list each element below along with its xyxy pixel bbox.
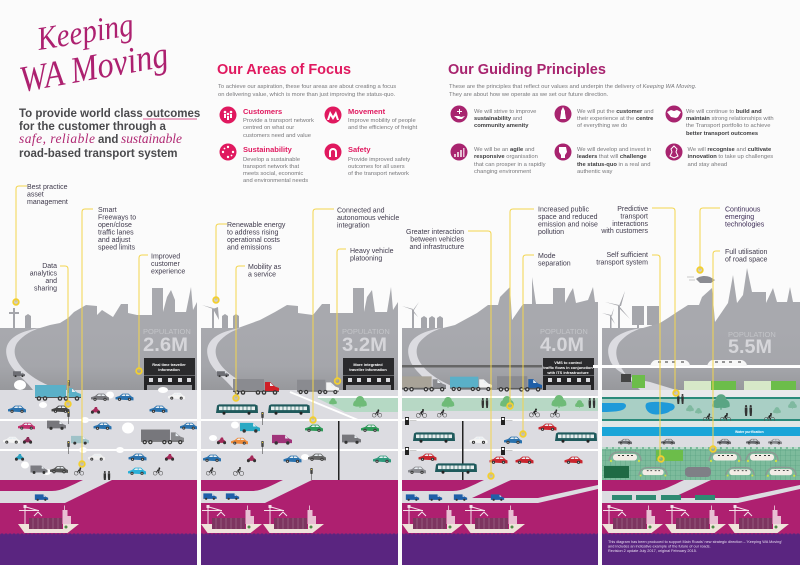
population label: POPULATION: [540, 327, 588, 336]
principle: leaders: the status-quo: [577, 162, 617, 168]
text: customers: Customers: [243, 107, 282, 116]
panel 4: population 5.5M: [593, 206, 800, 535]
port: magenta land, ramps and ships: [402, 480, 598, 535]
sign: real time traveller information: [144, 358, 195, 390]
annotation: smart freeways: Smart: [98, 207, 117, 214]
principle: sustainability: We will strive to improve: [474, 109, 536, 115]
annotation: best practice asset management: Best practice: [27, 184, 68, 191]
text: safety: [348, 145, 410, 177]
skyline: [602, 268, 800, 390]
annotation: renewable energy: to address rising: [227, 230, 278, 236]
sign: VMS: with ITS infrastructure: [546, 370, 589, 375]
population label: 3.2M: [342, 335, 387, 356]
text: safety: Safety: [348, 145, 371, 154]
icon: chart: [450, 144, 468, 160]
annotation: improved customer experience: customer: [151, 261, 180, 268]
principle: agile: that can prosper in a rapidly: [474, 162, 546, 168]
principle: customer: centre: [636, 116, 654, 122]
annotation: data analytics: Data: [42, 263, 57, 270]
annotation: connected and autonomous: integration: [337, 222, 370, 230]
icon: sustainability: [220, 144, 236, 160]
road lanes: [402, 390, 598, 480]
water purification channel: Water purification: [735, 430, 764, 434]
annotation: increased public space: space and reduced: [538, 214, 598, 221]
wind turbine and water tanks: [402, 302, 443, 329]
principle: innovation: We will: [688, 147, 707, 153]
annotation: increased public space: Increased public: [538, 206, 589, 214]
green corridor: [290, 392, 398, 420]
windmill and water tank: [9, 308, 31, 329]
annotation lines: [13, 186, 148, 467]
managed road line: [402, 365, 542, 368]
port: magenta land, ramp and ship: [0, 480, 197, 535]
title: Keeping WA Moving: [16, 7, 171, 101]
footer note: This diagram has been produced to support Main Roads' new strategic direction – 'Keeping WA Moving': [608, 540, 782, 544]
road lanes: [201, 390, 398, 480]
principle: customer: customer and: [616, 109, 654, 115]
population label: [342, 327, 390, 356]
exhaust clouds: [209, 422, 309, 460]
principles intro text: These are the principles that reflect our values and underpin the delivery of: [449, 84, 643, 90]
vehicles: lane 2: [3, 421, 197, 445]
icon: customers: [220, 106, 236, 124]
trucks: [402, 376, 542, 392]
text: sustainability: [243, 145, 308, 184]
sign: VMS: traffic flows in conjunction: [543, 365, 593, 370]
aspiration statement: safe, reliable: [19, 131, 95, 146]
icon: person: [554, 106, 572, 122]
footer note: and includes an indicative example of the future of our roads.: [608, 544, 711, 548]
green corridor with ponds: [602, 390, 800, 425]
population label: 5.5M: [728, 337, 772, 358]
annotation: renewable energy: and emissions: [227, 244, 272, 252]
principle: leaders: that will challenge: [599, 154, 647, 160]
annotation: data analytics: analytics: [30, 270, 58, 278]
aspiration statement: for the customer through a: [19, 121, 167, 133]
annotation: increased public space: emission and noise: [538, 222, 598, 228]
annotation: improved customer experience: Improved: [151, 254, 180, 260]
heading: our guiding principles: Our Guiding Principles: [448, 62, 606, 78]
skyline: [0, 287, 197, 390]
port: magenta land, ramp and ships: [201, 480, 398, 535]
text: customers: Provide a transport network: [243, 118, 314, 124]
text: movement: Movement: [348, 107, 386, 116]
principle: agile: changing environment: [474, 169, 531, 175]
icon: movement: [324, 106, 342, 124]
icon: innovation: [666, 144, 682, 160]
text: sustainability: transport network that: [243, 164, 299, 170]
text: sustainability: Develop a sustainable: [243, 157, 300, 163]
principle: leaders: authentic way: [577, 169, 613, 175]
principles intro text: Keeping WA Moving.: [643, 84, 696, 90]
vehicles: lane 1: [8, 385, 185, 414]
panel: our areas of focus: [217, 62, 418, 184]
annotation: connected and autonomous: autonomous vehicle: [337, 215, 399, 222]
footer note: Revision 2 update July 2017, original February 2015.: [608, 549, 697, 553]
annotation: best practice asset management: asset: [27, 192, 44, 198]
focus intro text: on delivering value, which is more than just improving the status-quo.: [218, 92, 396, 98]
sign: real time traveller information: information: [158, 367, 180, 372]
principle: innovation: recognise and cultivate: [707, 147, 771, 153]
annotation: predictive transport: Predictive: [617, 206, 648, 213]
title: Keeping WA Moving: WA Moving: [16, 34, 171, 101]
annotation: smart freeways: and adjust: [98, 237, 130, 244]
principle: customer: of everything we do: [577, 123, 627, 129]
principle: relationships: We will continue to: [686, 109, 736, 115]
title: Keeping WA Moving: Keeping: [34, 7, 136, 58]
population label: [143, 327, 191, 356]
panel 2: population 3.2M: [201, 208, 399, 535]
ocean band: [0, 533, 800, 565]
principle: leaders: in a real and: [617, 162, 650, 168]
text: movement: and the efficiency of freight: [348, 125, 418, 131]
sign: VMS: [543, 358, 594, 390]
principle: customer: We will put the: [577, 109, 616, 115]
icon: raised fist: [554, 144, 572, 160]
annotation: continuous emerging technologies: technologies: [725, 222, 765, 228]
population label: 4.0M: [540, 335, 584, 356]
aspiration statement: To provide world class outcomes: [19, 108, 200, 120]
road ramp curve: [408, 328, 462, 390]
annotation: heavy vehicle platooning: Heavy vehicle: [350, 248, 394, 255]
principles intro text: They are about how we operate as we set our future direction.: [449, 92, 609, 98]
annotation: renewable energy: operational costs: [227, 237, 280, 244]
annotation: heavy vehicle platooning: platooning: [350, 256, 382, 262]
annotation: predictive transport: with customers: [600, 228, 648, 235]
skyline: [402, 277, 598, 390]
annotation: smart freeways: Freeways to: [98, 214, 136, 222]
annotation: greater interaction: and infrastructure: [410, 244, 464, 251]
sign: more integrated traveller information: More integrated: [353, 362, 383, 367]
annotation: mobility as a service: Mobility as: [248, 264, 282, 271]
text: movement: [348, 107, 418, 131]
road ramp curve: [207, 328, 261, 390]
annotation: continuous emerging technologies: emerging: [725, 214, 754, 221]
aspiration statement: road-based transport system: [19, 148, 178, 160]
sign: real time traveller information: Real time traveller: [152, 362, 186, 367]
text: sustainability: Sustainability: [243, 145, 293, 154]
population label: 2.6M: [143, 335, 188, 356]
principle: sustainability: and: [511, 116, 522, 122]
annotation: smart freeways: open/close: [98, 222, 132, 229]
text: customers: [243, 107, 314, 139]
text: customers: centred on what our: [243, 125, 294, 131]
panel 3: population 4.0M: [402, 206, 598, 535]
aspiration statement: and: [98, 134, 118, 146]
text: safety: outcomes for all users: [348, 164, 405, 170]
port: magenta land, ramps and ships: [602, 480, 800, 535]
vehicle on ramp: [217, 371, 229, 377]
population label: [728, 330, 776, 358]
wind turbine and water tanks: [202, 305, 239, 329]
principle: innovation: and stay ahead: [688, 162, 727, 168]
motor cycle lane: [602, 436, 800, 447]
text: safety: Provide improved safety: [348, 157, 410, 163]
principle: agile: organisation: [505, 154, 538, 160]
icon: hand and plant: [450, 106, 468, 122]
flying vehicle: [687, 276, 715, 283]
panel 1: population 2.6M: [0, 184, 197, 535]
annotation: greater interaction: between vehicles: [410, 236, 464, 244]
annotation: full utilisation: Full utilisation: [725, 249, 768, 256]
principle: sustainability: community amenity: [474, 123, 529, 129]
vehicles: lanes with buses and electric cars: [405, 417, 597, 480]
vehicles: buses and lanes: [203, 404, 391, 481]
principle: agile: agile and: [510, 147, 534, 153]
annotation: greater interaction: Greater interaction: [406, 229, 464, 236]
principle: relationships: better transport outcomes: [686, 131, 758, 137]
trucks: platooning: [233, 379, 339, 395]
sign: more integrated traveller information: [343, 358, 394, 390]
elevated rail line with trains: [593, 360, 800, 368]
annotation: data analytics: sharing: [34, 286, 57, 292]
annotation: self sufficient: transport system: [596, 260, 648, 266]
principle: relationships: the Transport portfolio to achieve: [686, 123, 770, 129]
text: customers: customers need and value: [243, 133, 311, 139]
text: safety: of the transport network: [348, 171, 409, 177]
principle: customer: their experience at the: [577, 116, 636, 122]
principle: innovation: to take up challenges: [717, 154, 773, 160]
focus intro text: To achieve our aspiration, these four areas are about creating a focus: [218, 84, 396, 90]
annotation: predictive transport: transport: [620, 214, 648, 220]
road lanes: [0, 390, 197, 480]
road ramp curve: [602, 328, 683, 395]
sign: more integrated traveller information: traveller information: [349, 367, 387, 372]
annotation: best practice asset management: management: [27, 199, 68, 206]
autonomous pods and long trucks: [621, 374, 797, 394]
annotation: predictive transport: interactions: [612, 221, 648, 228]
principle: innovation: innovation: [688, 154, 717, 160]
sign: VMS: VMS to control: [554, 360, 582, 365]
annotation: smart freeways: traffic lanes: [98, 230, 134, 236]
green corridor: [402, 395, 598, 418]
annotation: data analytics: and: [45, 278, 57, 285]
annotation: smart freeways: speed limits: [98, 244, 135, 252]
aspiration statement: sustainable: [121, 131, 182, 146]
water purification channel: [602, 421, 800, 436]
annotation lines: [652, 208, 720, 462]
principle: relationships: maintain: [686, 116, 710, 122]
annotation: increased public space: pollution: [538, 229, 564, 236]
annotation: mode separation: Mode: [538, 253, 556, 260]
traffic lights: [67, 380, 70, 454]
principle: relationships: strong relationships with: [710, 116, 774, 122]
annotation: mobility as a service: a service: [248, 272, 276, 278]
annotation: self sufficient: Self sufficient: [606, 252, 648, 259]
exhaust clouds: [14, 380, 168, 475]
principle: agile: We will be an: [474, 147, 510, 153]
annotation: mode separation: separation: [538, 260, 571, 268]
wind turbines and solar panels: [602, 291, 659, 329]
population label: POPULATION: [143, 327, 191, 336]
principle: relationships: build and: [736, 109, 762, 115]
population label: POPULATION: [728, 330, 776, 339]
icon: handshake: [666, 106, 682, 122]
vehicle on ramp: [13, 371, 25, 377]
principle: sustainability: sustainability: [474, 116, 512, 122]
icon: safety: [324, 144, 342, 160]
annotation lines: [213, 209, 346, 423]
principle: leaders: leaders: [577, 154, 597, 160]
population label: POPULATION: [342, 327, 390, 336]
annotation: renewable energy: Renewable energy: [227, 222, 286, 229]
annotation: full utilisation: of road space: [725, 256, 768, 264]
population label: [540, 327, 588, 356]
principle: leaders: We will develop and invest in: [577, 147, 651, 153]
skyline: [201, 287, 398, 390]
aspiration statement: [19, 108, 200, 160]
principle: agile: responsive: [474, 154, 505, 160]
annotation: connected and autonomous: Connected and: [337, 208, 385, 214]
text: sustainability: meets social, economic: [243, 171, 303, 177]
road ramp curve: [6, 328, 60, 390]
vehicles: lane 3: [15, 454, 174, 481]
annotation lines: [468, 209, 534, 479]
text: movement: Improve mobility of people: [348, 118, 416, 124]
annotation: continuous emerging technologies: Continuous: [725, 206, 761, 214]
panel: our guiding principles: [448, 62, 774, 175]
smart road grid with pods: [602, 447, 800, 480]
text: sustainability: and environmental needs: [243, 178, 308, 184]
heading: our areas of focus: Our Areas of Focus: [217, 62, 351, 78]
annotation: improved customer experience: experience: [151, 268, 185, 276]
